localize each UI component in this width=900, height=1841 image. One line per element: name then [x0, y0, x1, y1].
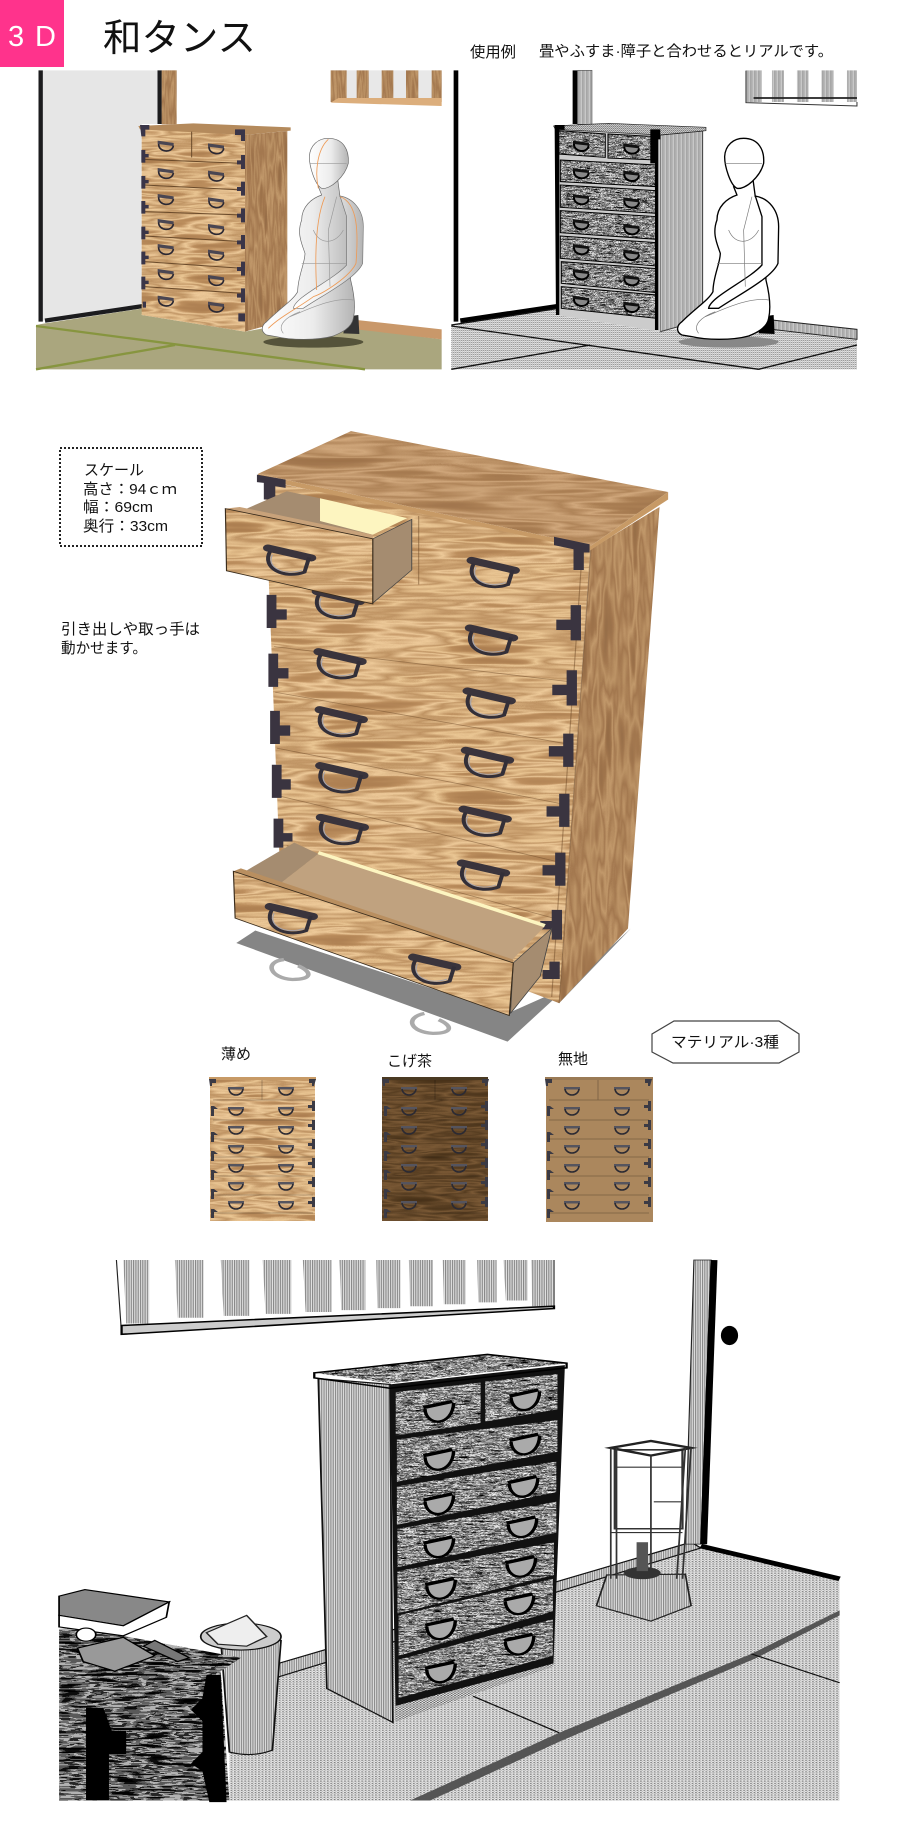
- book: [59, 1590, 169, 1636]
- objects on chest: [76, 1628, 189, 1671]
- side panel: [559, 507, 660, 1003]
- material callout: [652, 1021, 799, 1063]
- panel: manga room scene: [59, 1260, 840, 1802]
- title: 和タンス: [103, 18, 256, 60]
- main tansu: [314, 1354, 567, 1722]
- monochrome mannequin: [678, 138, 779, 348]
- scale info box: 幅：69cm: [83, 499, 153, 516]
- badge: 3D: 3D: [8, 21, 56, 53]
- monochrome post: [578, 70, 592, 124]
- floor shadow: [236, 928, 631, 1042]
- note: movable drawers: [61, 621, 200, 657]
- material callout: マテリアル·3種: [671, 1034, 779, 1051]
- monochrome wall frames: [456, 70, 575, 322]
- front panel: [265, 481, 591, 1003]
- tatami floor: [36, 308, 442, 369]
- tatami floor: [229, 1546, 840, 1801]
- mini tansu: dark brown: [382, 1077, 489, 1221]
- metal brackets: [257, 475, 590, 979]
- usage caption: 畳やふすま·障子と合わせるとリアルです。: [539, 43, 833, 60]
- floor edge: [701, 1546, 840, 1579]
- scale info box: 高さ：94ｃｍ: [83, 481, 177, 498]
- note: movable drawers: 動かせます。: [61, 640, 147, 657]
- mannequin: [262, 138, 363, 348]
- scale info box: 奥行：33cm: [83, 518, 168, 535]
- panel: monochrome usage example: [451, 70, 857, 369]
- top surface: [258, 431, 668, 550]
- window: [331, 70, 442, 106]
- baseboard: [357, 320, 442, 339]
- waste basket: [201, 1615, 281, 1755]
- open lower drawer: [233, 843, 552, 1016]
- large tansu render: [225, 431, 668, 1042]
- post: [162, 70, 177, 124]
- fusuma door: [42, 70, 159, 321]
- tansu: [138, 123, 291, 332]
- monochrome baseboard: [772, 320, 857, 339]
- usage caption: 使用例: [470, 44, 516, 61]
- monochrome window: [746, 70, 857, 106]
- monochrome tansu: [554, 123, 706, 332]
- material label: dark brown: こげ茶: [387, 1053, 432, 1070]
- scale info box: [60, 448, 202, 546]
- panel: colour usage example: [36, 70, 442, 369]
- monochrome tatami: [451, 308, 857, 369]
- badge: 3D: [0, 0, 64, 67]
- small chest foreground: [59, 1627, 241, 1802]
- material label: plain: 無地: [558, 1051, 588, 1068]
- note: movable drawers: 引き出しや取っ手は: [61, 621, 200, 638]
- material label: light: 薄め: [221, 1046, 251, 1063]
- mini tansu: light: [209, 1077, 316, 1221]
- handles on chest: [317, 560, 515, 889]
- lantern: [596, 1441, 691, 1621]
- mini tansu: plain: [545, 1077, 653, 1222]
- baseboard: [278, 1542, 701, 1677]
- tatami borders: [410, 1610, 840, 1801]
- door post: [685, 1260, 714, 1544]
- scale info box: スケール: [84, 462, 144, 479]
- door knob: [721, 1326, 738, 1345]
- window lattice: [116, 1260, 554, 1334]
- open upper drawer: [225, 491, 412, 604]
